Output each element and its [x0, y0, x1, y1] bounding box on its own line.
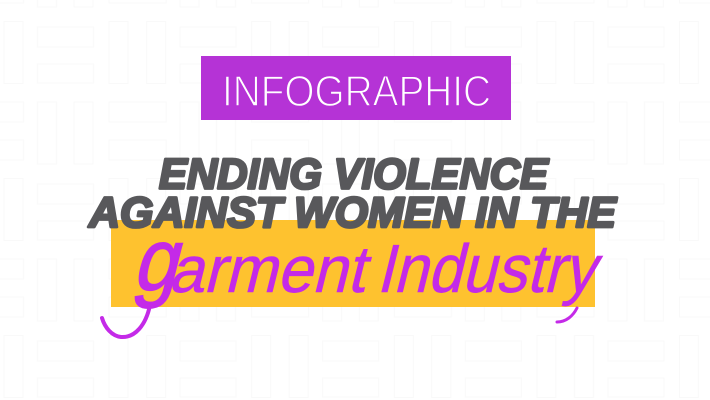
script title: garment industry: Industry: [372, 230, 610, 307]
flourish: y tail: [557, 308, 577, 322]
title: ending violence against women in the: AGAINST WOMEN IN THE: [88, 189, 617, 237]
title: ending violence against women in the: [88, 150, 617, 237]
highlight block: yellow: [111, 220, 595, 307]
script title: garment industry: [102, 210, 610, 337]
script title: garment industry: g: [127, 210, 196, 309]
flourish: g tail: [102, 305, 150, 337]
badge: infographic: INFOGRAPHIC: [222, 67, 491, 116]
title: ending violence against women in the: ENDING VIOLENCE: [159, 150, 549, 198]
badge: infographic: [201, 56, 511, 120]
script title: garment industry: arment: [164, 233, 379, 307]
